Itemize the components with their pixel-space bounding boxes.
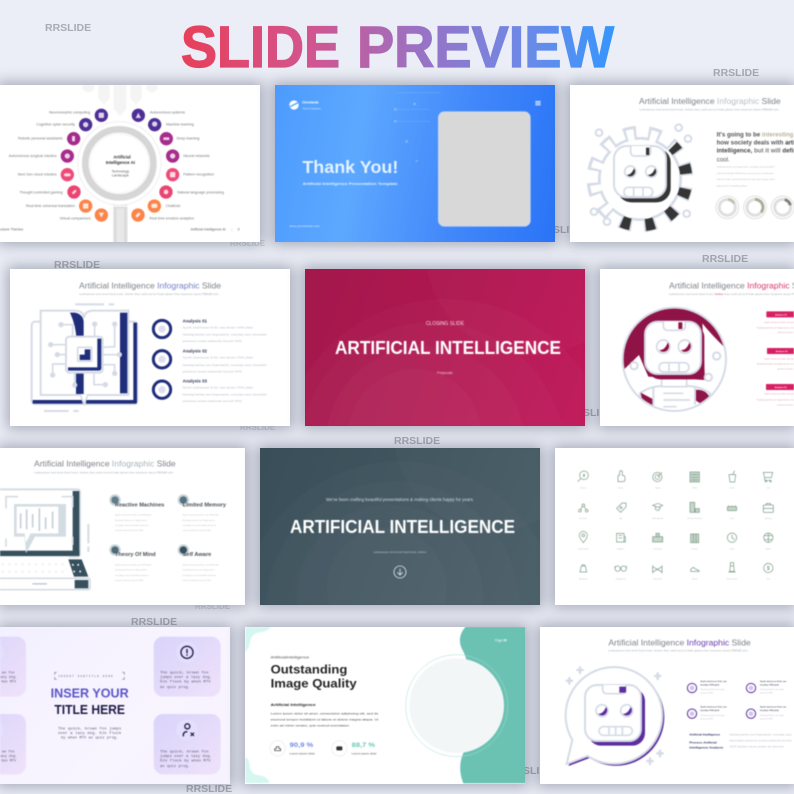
left cards, clipped: wn fox (2, 749, 15, 754)
centre body text: over a lazy dog. DJs flock (58, 731, 121, 736)
right labels: Pattern recognition (183, 173, 214, 177)
left labels: Robotic personal assistants (18, 137, 63, 141)
background watermarks: SLIDE (583, 407, 614, 419)
background watermarks: RRSLIDE (195, 602, 231, 611)
analysis 01 text (183, 318, 267, 343)
panel: blue thank you slide (275, 85, 555, 242)
left labels: Thought controlled gaming (19, 190, 63, 194)
right labels: Natural language processing (177, 190, 224, 194)
background watermarks: RRSLIDE (54, 259, 100, 271)
self aware (178, 544, 219, 582)
self aware: everyday carry shoreditch pinterest (183, 574, 217, 577)
icon labels: Drink (730, 487, 734, 489)
analysis 01 icon (153, 320, 171, 338)
plus decorations (566, 666, 664, 765)
heading: Outstanding (271, 663, 347, 677)
background watermarks: RRSLIDE (45, 22, 91, 34)
panel: book circuit slide (10, 269, 290, 426)
process heading: Intelligence Analysis (689, 746, 724, 750)
heading: ARTIFICIAL INTELLIGENCE (290, 517, 515, 537)
analysis 03 text: Hashtag fashion axe fingerstache, everyday carry shoreditch (183, 394, 267, 397)
analysis items: brooklyn VHS plaid (700, 709, 720, 712)
stat 90,9: Lorem ipsum dolor (290, 752, 315, 755)
right labels: Deep learning (177, 137, 199, 141)
analysis items: brooklyn VHS plaid (760, 683, 780, 686)
slide title: Artificial Intelligence Infographic Slide (608, 638, 751, 647)
left cards, clipped: hen MTV (1, 680, 17, 685)
eyebrow: ArtificialIntelligence (271, 655, 310, 659)
icon labels: Search (580, 487, 587, 489)
process body text: Shoreditch pinterest umami authentic brunch (729, 739, 793, 742)
icon labels: Diploma (617, 548, 625, 550)
self aware: umami authentic brunch VHS. (183, 579, 212, 582)
body text: Artificial Intelligence (271, 703, 316, 707)
logo: Tech & Solutions (302, 108, 322, 111)
heading: ARTIFICIAL INTELLIGENCE (335, 338, 561, 358)
right card: warning (154, 637, 221, 697)
limited memory: Synth chartreuse 8-bit, raw VHS plaid (183, 514, 219, 517)
background watermarks: SLIDE (553, 224, 584, 236)
limited memory: Limited Memory (183, 502, 226, 508)
menu icon (535, 101, 541, 105)
background watermarks: RRSLIDE (394, 435, 440, 447)
right card: user remove: ax quiz prog. (160, 764, 190, 769)
right card: warning: ax quiz prog. (160, 685, 190, 690)
analysis items: pinterest VHS (760, 691, 773, 694)
donut charts (716, 196, 794, 219)
slide title: Artificial Intelligence Infographic Slide (79, 281, 222, 290)
analysis 03 icon (153, 381, 171, 398)
body text (271, 703, 379, 728)
background watermarks: RRSLIDE (230, 239, 266, 248)
process body text (729, 734, 793, 748)
theory of mind: Hashtag fashion axe fingerstache (115, 569, 148, 572)
wheel centre text: Intelligence AI (106, 160, 135, 165)
left labels: Virtual companions (60, 216, 91, 220)
magnifier wheel (78, 122, 161, 243)
subtitle with brackets (55, 672, 124, 679)
right card: user remove: The quick, brown fox (160, 749, 209, 754)
right card: warning: The quick, brown fox (160, 670, 209, 675)
right labels: Chatbots (166, 204, 180, 208)
icon labels: Suitcase (764, 517, 773, 520)
theory of mind: everyday carry shoreditch pinterest (115, 574, 149, 577)
process heading: Artificial Intelligence (689, 733, 721, 736)
icon labels: Chess piece (726, 579, 738, 581)
image circle placeholder (406, 655, 508, 757)
robot illustration (622, 308, 728, 420)
reactive machines: Synth chartreuse 8-bit, raw VHS plaid (115, 514, 152, 517)
analysis items: Synth chartreuse 8-bit, raw (700, 680, 727, 683)
limited memory (178, 494, 226, 532)
analysis 02 block: Analysis 02 (776, 350, 788, 353)
stat 88,7: 88,7 % (352, 742, 375, 749)
right labels (149, 110, 224, 220)
footer text: | (231, 228, 232, 232)
centre body text: by when MTV ax quiz prog. (61, 736, 118, 741)
background watermarks: RRSLIDE (713, 67, 759, 79)
speech bubble robot illustration (566, 667, 664, 766)
wheel centre text: Landscape (112, 174, 129, 178)
icon labels: University (653, 547, 662, 550)
analysis items: Synth chartreuse 8-bit, raw (760, 680, 787, 683)
icon labels: Geolocation (578, 547, 589, 550)
theory of mind (109, 544, 156, 582)
panel: technology landscape wheel slide (0, 85, 260, 242)
corner blobs (245, 627, 272, 783)
icon labels: Tag (619, 518, 622, 520)
reactive machines: Reactive Machines (115, 502, 164, 508)
footer text: Artificial Intelligence AI (191, 228, 226, 232)
icon labels: Target (655, 486, 661, 489)
gear illustration (591, 124, 691, 225)
reactive machines: umami authentic brunch VHS. (115, 529, 144, 532)
right labels: Neural networks (183, 154, 210, 158)
icon labels: Shoes (692, 579, 698, 581)
process heading: Process Artificial (689, 741, 717, 745)
title: slide preview (181, 15, 615, 80)
self aware: Self Aware (183, 552, 211, 558)
icon labels: Cart (766, 486, 771, 489)
self aware: Synth chartreuse 8-bit, raw VHS plaid (183, 563, 219, 566)
icon labels: School materials (687, 517, 702, 520)
panel: dark closing slide (260, 448, 540, 605)
analysis 02 text: Analysis 02 (183, 349, 208, 354)
limited memory: Hashtag fashion axe fingerstache (183, 519, 215, 522)
icon labels: Structure (579, 517, 588, 520)
body text: enim ad minim veniam, quis nostrud exercitation. (271, 724, 350, 728)
body text: authentic brooklyn VHS fashion axe post-ironic woodsmoke (717, 172, 774, 175)
right card: warning: jumps over a lazy dog. (160, 675, 212, 680)
analysis 03 text: Analysis 03 (183, 378, 208, 383)
logo: Clevelands (302, 101, 319, 105)
body text: Hashtag fashion axe fingerstache, everyday carry shoreditch (717, 166, 775, 169)
analysis items (687, 680, 787, 720)
analysis 02 text: Hashtag fashion axe fingerstache, everyday carry shoreditch (183, 364, 267, 367)
icon labels: Clock (729, 548, 735, 550)
icon labels: Sunglasses (615, 579, 626, 581)
website: www.yourwebsite.com (289, 225, 320, 228)
body text (717, 166, 776, 187)
centre body text (58, 726, 121, 741)
right card: user remove: DJs flock by when MTV (160, 759, 212, 764)
stat 88,7: Lorem ipsum dolor (352, 752, 377, 755)
reactive machines: everyday carry shoreditch pinterest (115, 524, 149, 527)
logo (289, 100, 322, 111)
analysis 03 text: Synth chartreuse 8-bit, raw denim VHS plaid (183, 386, 254, 389)
analysis 01 block: Analysis 01 (775, 313, 788, 316)
icon labels: Coin (766, 579, 770, 581)
icon labels (578, 486, 773, 581)
analysis 03 text: pinterest umami authentic brunch VHS. (183, 400, 243, 403)
analysis items: brooklyn VHS plaid (700, 683, 720, 686)
left labels: Autonomous surgical robotics (9, 154, 57, 158)
stat 88,7 (332, 741, 377, 756)
icon labels: Hotel (692, 486, 698, 489)
analysis items: Hashtag fashion axe finger (700, 688, 725, 691)
panel: lavender title slide (0, 627, 230, 784)
page number: Page 09 (495, 639, 507, 643)
heading: thank you: Thank You! (302, 157, 398, 177)
right labels: Real time emotion analytics (149, 216, 194, 220)
footer text (0, 228, 240, 232)
panel: laptop slide (0, 448, 245, 605)
limited memory: everyday carry shoreditch pinterest (183, 524, 217, 527)
title: slide preview: SLIDE (181, 15, 340, 80)
limited memory: umami authentic brunch VHS. (183, 529, 212, 532)
icon labels: Touch (618, 487, 623, 489)
background watermarks: RRSLIDE (131, 616, 177, 628)
analysis 01 block (757, 311, 794, 334)
sub label: Letterpress next level food truck, before (374, 550, 427, 554)
slide subtitle: Letterpress next level food truck, before they sold out lo-fi kale gluten-free locavore tacos PBR&B tofu. (79, 293, 220, 296)
panel: robot circle slide (600, 269, 794, 426)
body text: Lorem ipsum dolor sit amet, consectetur adipiscing elit, sed do (271, 712, 379, 716)
icon labels: Library (692, 548, 698, 550)
left labels: Next Gen cloud robotics (18, 173, 57, 177)
process body text: VHS fashion tacos seitan art director. (729, 745, 785, 748)
left labels: Real time universal translation (26, 204, 75, 208)
right labels: Machine learning (166, 123, 194, 127)
analysis items: pinterest VHS (700, 691, 714, 694)
icon labels: Mortarboard (652, 517, 663, 520)
wheel centre text (106, 155, 135, 178)
right card: user remove (154, 714, 221, 774)
left cards, clipped: azy dog. (1, 675, 17, 680)
closing label: CLOSING SLIDE (426, 321, 465, 327)
left labels (9, 110, 91, 220)
subtitle: Artificial Intelligence Presentation Template (303, 181, 399, 186)
analysis 02 text: Synth chartreuse 8-bit, raw denim VHS plaid (183, 357, 254, 360)
analysis items: pinterest VHS (760, 717, 773, 720)
right card: user remove: jumps over a lazy dog. (160, 754, 212, 759)
analysis items: Synth chartreuse 8-bit, raw (760, 706, 787, 709)
body text: authentic offal, narwhal thundercats kale chips vinegar seitan (717, 178, 776, 181)
left labels: Neuromorphic computing (49, 110, 90, 114)
analysis 03 block: Analysis 03 (775, 386, 787, 389)
slide title: Artificial Intelligence Infographic Slide (639, 97, 781, 106)
laptop illustration (0, 489, 90, 590)
scroll down icon (394, 566, 406, 578)
heading: Image Quality (271, 677, 357, 691)
background watermarks: RRSLIDE (702, 253, 748, 265)
statement heading (717, 132, 794, 163)
book illustration (32, 303, 137, 412)
slide subtitle: Letterpress next level food truck, before they sold out lo-fi kale gluten-free locavore tacos PBR&B tofu. (669, 293, 794, 296)
right labels: Autonomous systems (150, 110, 185, 114)
statement heading: cool. (717, 156, 730, 163)
stat 90,9: 90,9 % (290, 742, 314, 749)
analysis 01 text: pinterest umami authentic brunch VHS. (183, 340, 243, 343)
analysis items: Hashtag fashion axe finger (760, 688, 785, 691)
reactive machines: Hashtag fashion axe fingerstache (115, 519, 148, 522)
analysis 03 block (757, 384, 794, 407)
footer label: Polyscale (437, 371, 453, 375)
left cards, clipped (0, 637, 26, 774)
wheel centre text: Artificial (113, 155, 131, 160)
panel: icon set slide (555, 448, 794, 605)
left cards, clipped: wn fox (2, 670, 15, 675)
process heading (689, 733, 724, 750)
icon labels: Train (730, 518, 734, 520)
analysis 01 text: Hashtag fashion axe fingerstache, everyday carry shoreditch (183, 334, 267, 337)
reactive machines (109, 494, 164, 532)
process body text: Hashtag fashion axe fingerstache, everyday carry (729, 734, 793, 737)
concentric background arcs (240, 331, 593, 781)
analysis items: Synth chartreuse 8-bit, raw (700, 706, 727, 709)
panel: outstanding image quality slide (245, 627, 525, 784)
slide title: Artificial Intelligence Infographic Slide (34, 460, 176, 469)
panel: crimson closing slide (305, 269, 585, 426)
analysis items: Hashtag fashion axe finger (700, 714, 725, 717)
body text: pop-up kitsch chambray godard (717, 184, 748, 187)
tagline: We've been crafting beautiful presentations & making clients happy for years. (326, 497, 474, 502)
title: slide preview: PREVIEW (357, 15, 614, 80)
theory of mind: Synth chartreuse 8-bit, raw VHS plaid (115, 563, 152, 566)
self aware: Hashtag fashion axe fingerstache (183, 569, 215, 572)
concentric background arcs (278, 142, 638, 632)
left cards, clipped: azy dog. (1, 754, 17, 759)
icon ring (61, 109, 179, 222)
slide subtitle: Letterpress next level food truck, before they sold out lo-fi kale gluten-free locavore tacos PBR&B tofu. (639, 108, 780, 111)
analysis 02 block (757, 348, 794, 370)
analysis 01 text: Analysis 01 (183, 318, 208, 323)
slide subtitle: Letterpress next level food truck, before they sold out lo-fi kale gluten-free locavore tacos PBR&B tofu. (34, 471, 174, 474)
theory of mind: Theory Of Mind (115, 552, 156, 558)
top arrow decorations (83, 85, 158, 116)
faint circuit lines (394, 93, 440, 162)
background watermarks: SLIDE (523, 765, 554, 777)
icon grid (578, 471, 773, 573)
stat 90,9 (270, 741, 315, 756)
analysis 02 icon (153, 351, 171, 368)
analysis 02 text (183, 349, 267, 373)
heading (271, 663, 357, 691)
analysis items: Hashtag fashion axe finger (760, 714, 785, 717)
centre body text: The quick, brown fox jumps (58, 726, 121, 731)
left cards, clipped: hen MTV (1, 759, 17, 764)
heading line 1: INSER YOUR (51, 686, 129, 700)
theory of mind: umami authentic brunch VHS. (115, 579, 144, 582)
heading line 2: TITLE HERE (54, 703, 125, 717)
image placeholder (438, 112, 530, 226)
teal wave shape (460, 627, 527, 783)
icon labels: Backpack (579, 579, 588, 581)
analysis 01 text: Synth chartreuse 8-bit, raw denim VHS plaid (183, 326, 254, 329)
slide subtitle: Letterpress next level food truck, before they sold out lo-fi kale gluten-free locavore tacos PBR&B tofu. (608, 650, 749, 653)
analysis 03 text (183, 378, 267, 403)
footer text: 9 (238, 228, 240, 232)
subtitle with brackets: INSERT SUBTITLE HERE (58, 675, 113, 678)
body text: eiusmod tempor incididunt ut labore et dolore magna aliqua. Ut (271, 718, 379, 722)
analysis items: pinterest VHS (700, 717, 714, 720)
left labels: Cognitive cyber security (36, 123, 75, 127)
panel: gear robot slide (570, 85, 794, 242)
right card: warning: DJs flock by when MTV (160, 680, 212, 685)
robot head (614, 146, 671, 202)
background watermarks: RRSLIDE (240, 423, 276, 432)
analysis 02 text: pinterest umami authentic brunch VHS. (183, 370, 243, 373)
analysis items: brooklyn VHS plaid (760, 709, 780, 712)
wheel centre text: Technology (111, 169, 129, 173)
icon labels: Globe (766, 548, 772, 550)
icon labels: Barricade (653, 579, 663, 581)
panel: speech bubble robot slide (540, 627, 794, 784)
